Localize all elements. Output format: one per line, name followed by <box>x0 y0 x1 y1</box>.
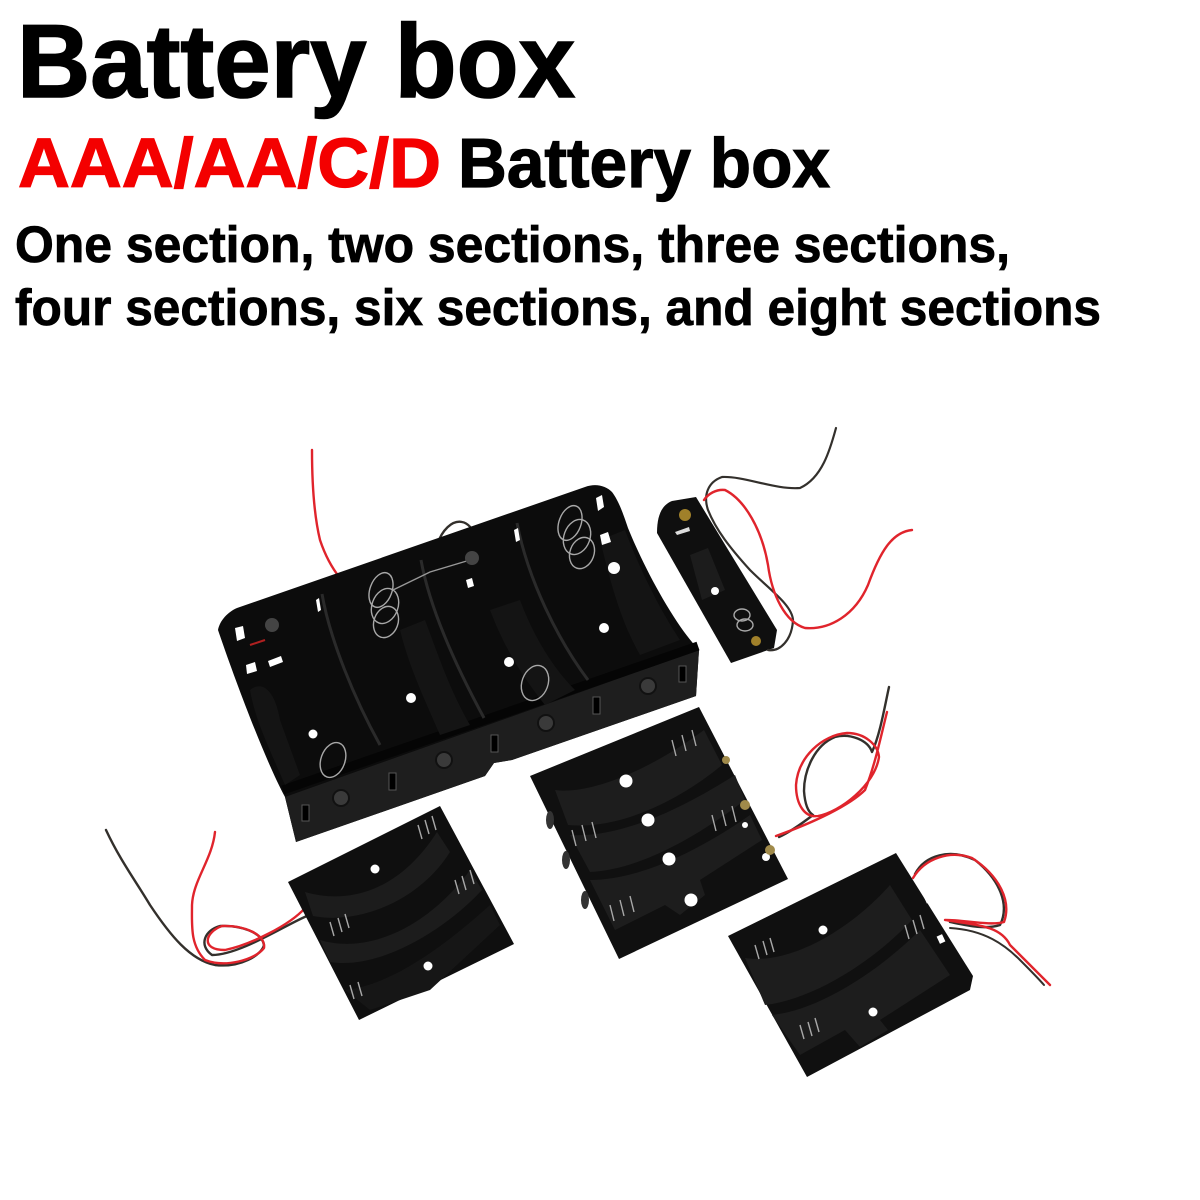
front face <box>285 650 699 842</box>
mounting holes <box>235 495 620 738</box>
holder body <box>218 485 699 842</box>
front slots <box>302 666 686 821</box>
section ridges <box>555 730 762 930</box>
wires <box>776 687 889 837</box>
springs and contacts <box>572 730 736 921</box>
section ridges <box>305 832 500 1010</box>
spring <box>734 609 753 631</box>
holes <box>370 864 432 970</box>
title: Battery box <box>17 4 575 120</box>
compartment dividers <box>322 523 588 745</box>
holder body <box>288 806 514 1020</box>
holder body <box>530 707 788 959</box>
holder body <box>728 853 973 1077</box>
red wire <box>704 490 912 628</box>
springs <box>755 915 924 1039</box>
holder body <box>657 497 777 663</box>
front screws <box>333 678 656 806</box>
holes <box>620 774 770 906</box>
left edge holes <box>546 811 589 909</box>
compartment floors <box>250 530 680 785</box>
wires behind large holder <box>312 450 474 578</box>
four-section AA holder, centre <box>530 687 889 959</box>
battery bay <box>690 548 725 600</box>
subtitle <box>18 124 830 202</box>
subtitle: battery box: Battery box <box>458 124 830 202</box>
single-section holder <box>657 428 912 663</box>
wires <box>106 830 307 965</box>
holes <box>818 894 945 1016</box>
description line 2: four sections, six sections, and eight sections <box>15 279 1101 336</box>
description text <box>15 216 1101 336</box>
four-section AA holder, left <box>106 806 514 1020</box>
large four-section D battery holder <box>218 450 699 842</box>
front rim <box>283 646 698 790</box>
wires <box>913 854 1050 985</box>
springs <box>316 502 599 781</box>
three-section AA holder, right <box>728 853 1050 1077</box>
springs <box>330 816 474 999</box>
subtitle: battery sizes: AAA/AA/C/D <box>18 124 441 202</box>
holes and contacts <box>675 509 761 646</box>
black wire <box>706 428 836 650</box>
contact tabs <box>250 551 479 645</box>
description line 1: One section, two sections, three sections, <box>15 216 1010 273</box>
section ridges <box>745 885 950 1055</box>
